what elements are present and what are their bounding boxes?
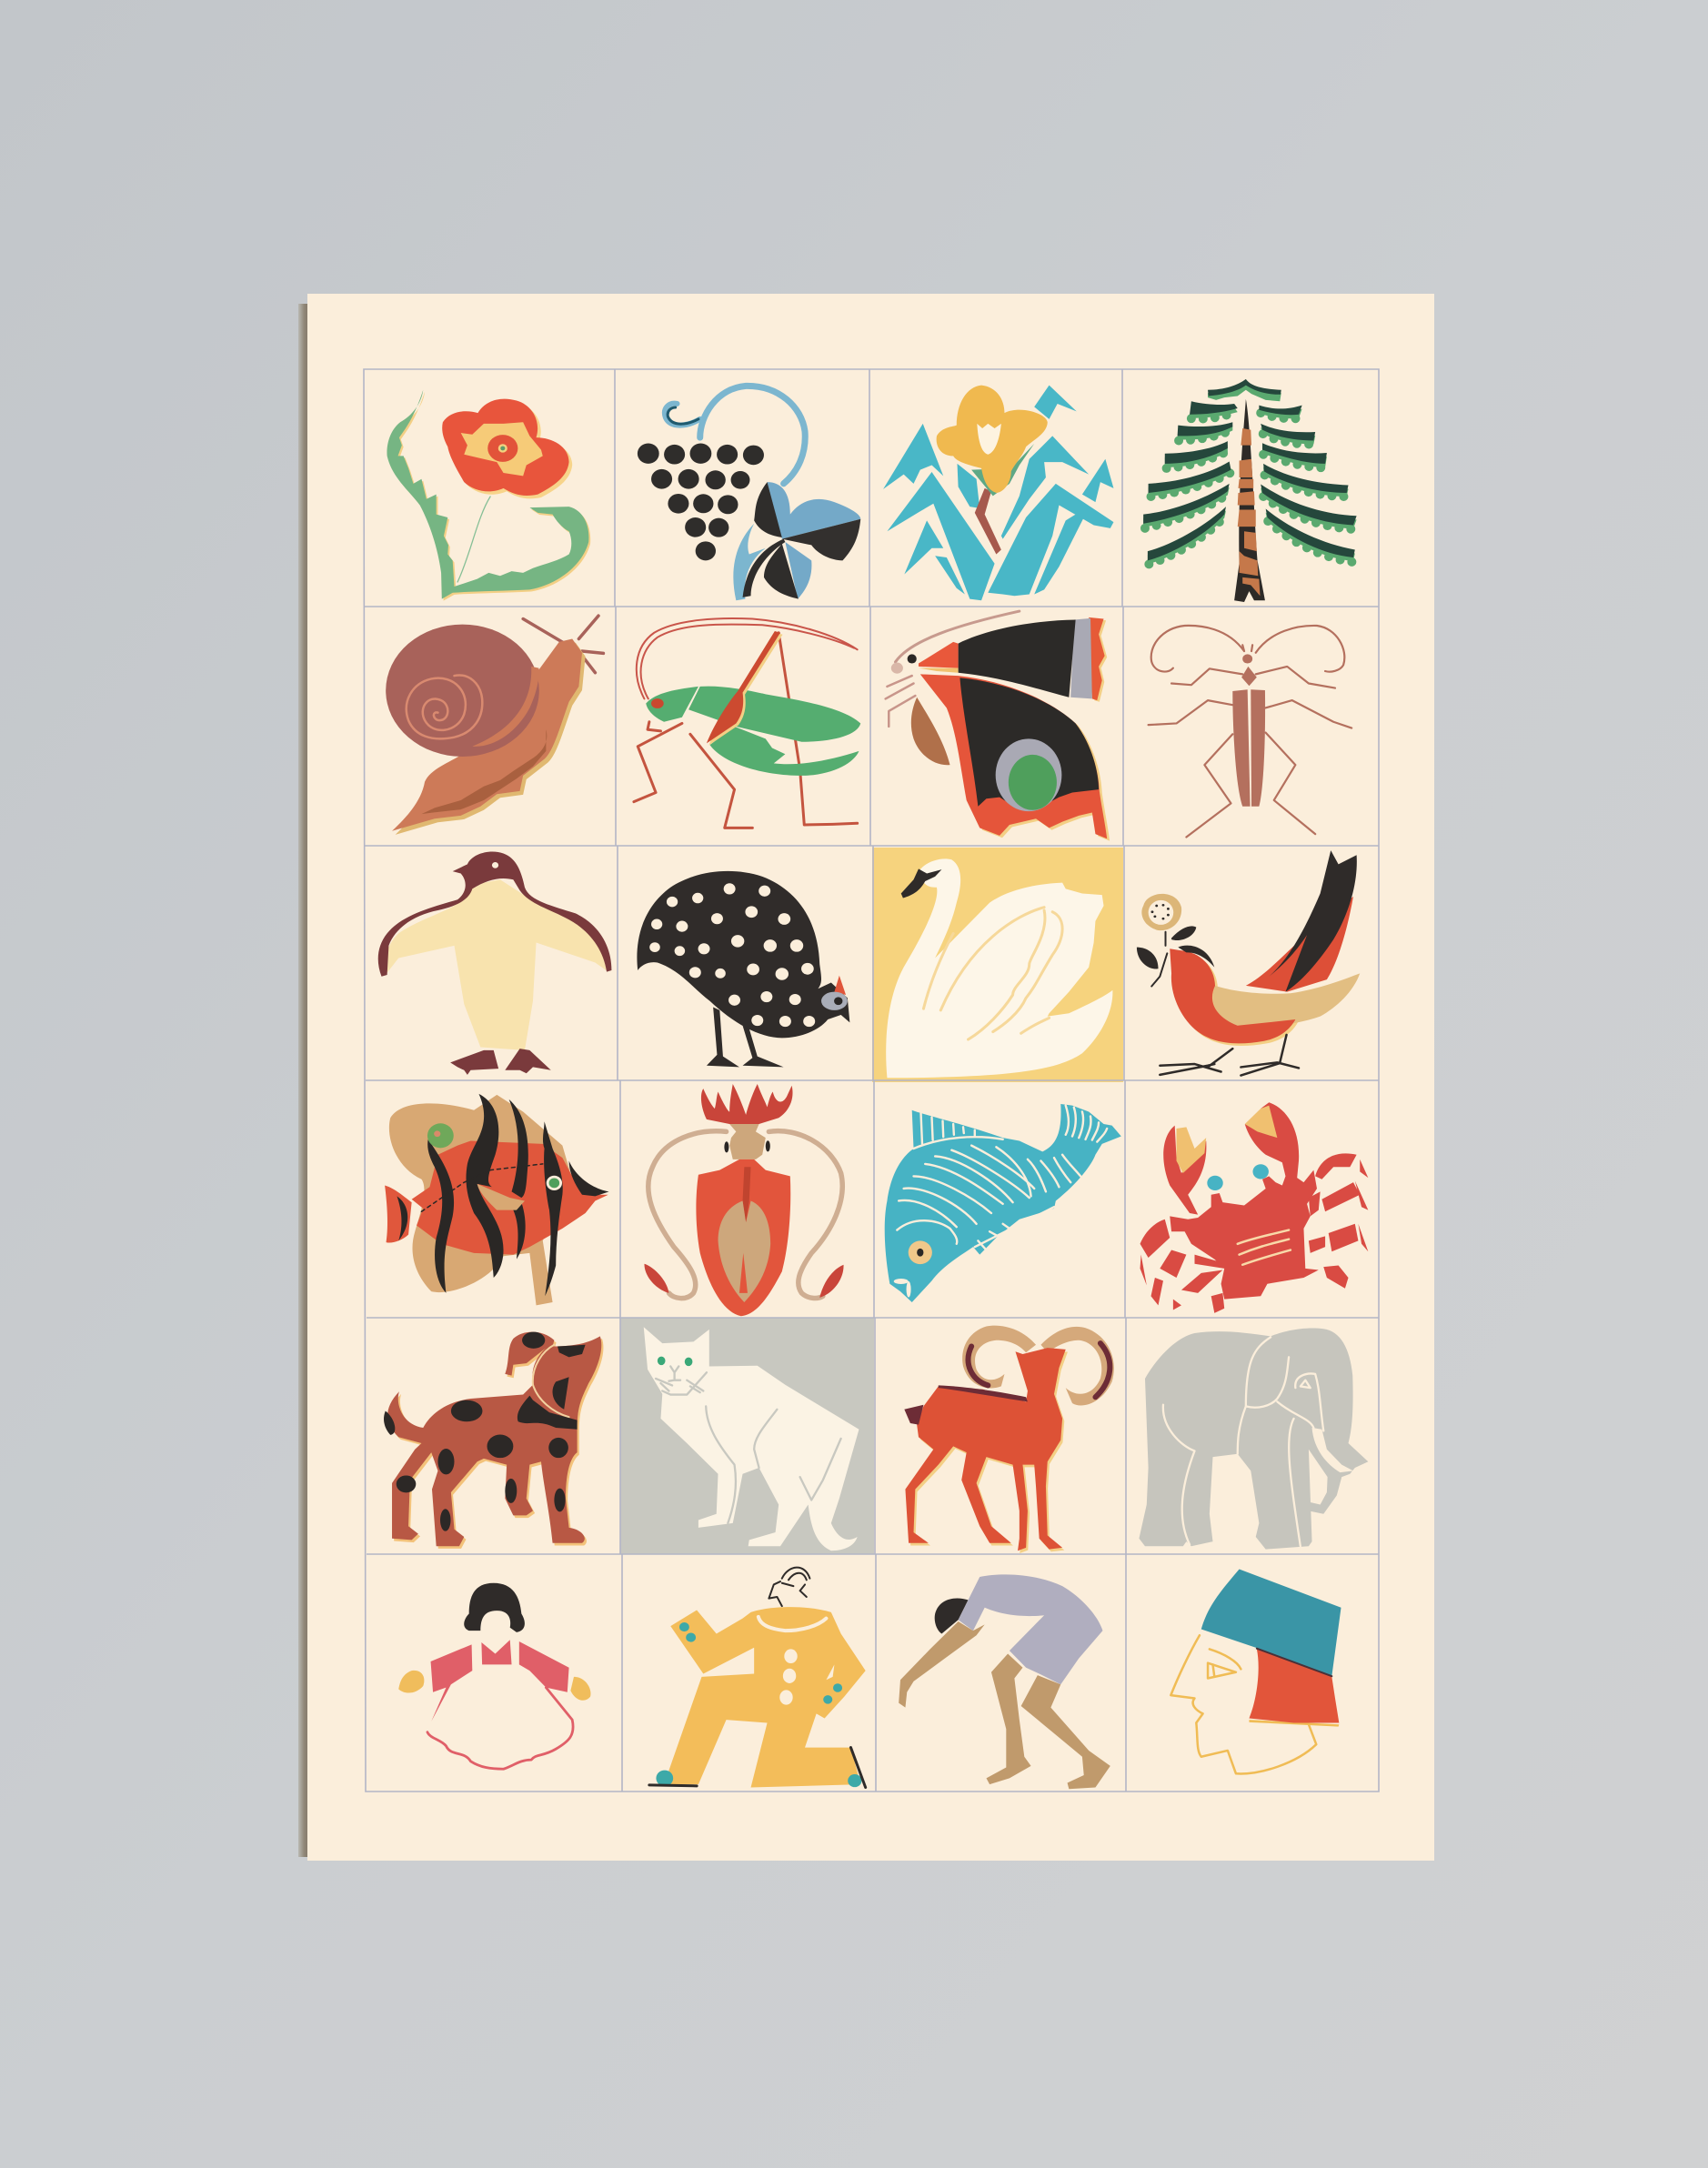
icon: longhorn beetle	[1149, 626, 1351, 838]
icon: guinea fowl	[637, 871, 849, 1067]
panel: cat background	[620, 1318, 874, 1554]
icon: grey elephant	[1139, 1328, 1368, 1550]
icon: bird with flower	[1137, 850, 1360, 1076]
block: mammals and figures left	[384, 1327, 866, 1788]
icon: fir tree	[1143, 379, 1357, 602]
panel: swan background	[872, 848, 1123, 1082]
block: mammals and figures right	[899, 1326, 1368, 1789]
icon: spotted dog	[384, 1332, 603, 1549]
icon: poppy flower	[387, 390, 590, 601]
icon: red crab	[1140, 1102, 1368, 1313]
icon: pierrot	[649, 1568, 866, 1788]
icon: yellow flower with blue leaves	[883, 386, 1113, 600]
block: plants and insects right	[883, 379, 1357, 841]
chart grid	[364, 369, 1379, 1792]
icon: butterfly	[886, 611, 1110, 841]
icon: swan	[886, 858, 1112, 1078]
icon: girl in apron	[398, 1583, 590, 1769]
icon: white cat	[644, 1327, 859, 1551]
icon: profile head with fez	[1170, 1570, 1341, 1773]
block: plants and insects left	[386, 386, 860, 835]
icon: ram	[904, 1326, 1114, 1553]
block: birds and fish right	[885, 850, 1368, 1313]
icon: penguin	[378, 852, 611, 1075]
icon: snail	[386, 616, 603, 835]
icon: blue fish	[885, 1104, 1121, 1302]
icon: grasshopper	[634, 618, 860, 828]
icon: bending figure	[899, 1574, 1110, 1789]
icon: squid	[644, 1084, 844, 1316]
icon: angelfish	[385, 1094, 609, 1305]
paper sheet	[298, 294, 1434, 1861]
block: birds and fish left	[378, 852, 849, 1316]
icon: grapes and vine	[638, 386, 860, 600]
